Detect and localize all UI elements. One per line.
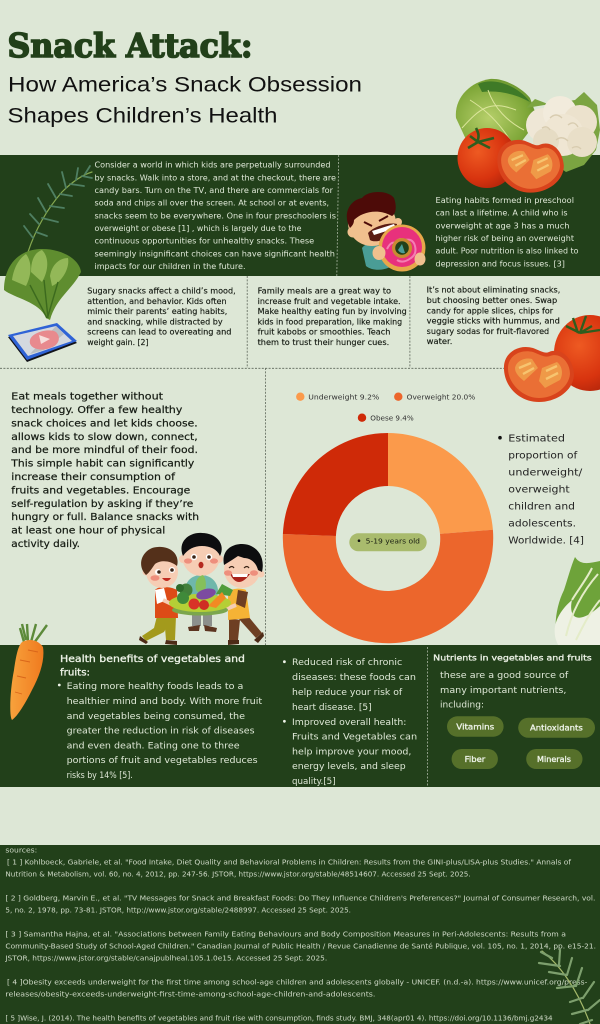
text: sources list: [ 4 ]Obesity exceeds underweight for the first time among school-age children and adolescents globally - UNICEF. (n.d.-a). https://www.unicef.org/press- [7, 979, 588, 987]
text: better snacks: candy for apple slices, chips for [427, 306, 554, 315]
text: nutrients intro: many important nutrients, [440, 686, 566, 696]
text: benefits column one: healthier mind and body. With more fruit [67, 697, 263, 707]
text: family meals: them to trust their hunger cues. [258, 338, 389, 347]
text: sources list: [ 5 ]Wise, J. (2014). The health benefits of vegetables and fruit rise with consumption, finds study. BMJ, 348(apr01 4). https://doi.org/10.1136/bmj.g2434 [5, 1015, 553, 1023]
text: chart description: adolescents. [508, 518, 576, 530]
icon: napa cabbage [555, 557, 600, 648]
text: family meal advice: snack choices and let kids choose. [11, 418, 198, 429]
pill: antioxidants [518, 718, 595, 738]
text: sugary snacks: Sugary snacks affect a child’s mood, [87, 286, 236, 296]
text: family meal advice: fruits and vegetables. Encourage [11, 485, 190, 496]
icon: rosemary corner sprig [539, 950, 600, 1024]
text: family meal advice: Eat meals together without [11, 392, 163, 403]
text: family meals: increase fruit and vegetable intake. [258, 297, 401, 306]
left child [139, 547, 180, 645]
text: intro paragraph: impacts for our children in the future. [94, 262, 246, 271]
text: sugary snacks [87, 286, 236, 347]
text: family meal advice: allows kids to slow down, connect, [11, 432, 198, 443]
text: chart description: proportion of [508, 450, 578, 462]
panel: intro band [0, 155, 600, 276]
legend: obese: Obese 9.4% [370, 414, 414, 422]
segment: obese [283, 433, 388, 536]
text: family meal advice: technology. Offer a few healthy [11, 405, 183, 416]
text: family meal advice: and be more mindful of their food. [11, 445, 198, 456]
text: benefits column one: and even death. Eating one to three [67, 742, 240, 752]
text: benefits column one: Eating more healthy foods leads to a [67, 682, 243, 692]
text: chart description: underweight/ [508, 468, 583, 478]
text: intro paragraph: seemingly insignificant choices can have significant health [94, 249, 335, 258]
icon: boy eating donut [347, 192, 426, 272]
text: sources list: [ 1 ] Kohlboeck, Gabriele, et al. "Food Intake, Diet Quality and Behavioral Problems in Children: Results from the GINI-plus/LISA-plus Studies." Annals of [7, 859, 572, 867]
age pill [349, 533, 427, 551]
text: benefits column two: heart disease. [5] [292, 703, 372, 713]
text: sources list: JSTOR, https://www.jstor.org/stable/canajpublheal.105.1.0e15. Accessed 25 Sept. 2025. [4, 955, 327, 963]
text: better snacks: water. [427, 337, 452, 346]
donut chart [283, 433, 493, 643]
segment: overweight [283, 530, 493, 643]
legend [296, 392, 475, 422]
text: chart description: overweight [508, 484, 570, 496]
text: benefits column two: help improve your mood, [292, 748, 411, 758]
segment: underweight [388, 433, 493, 534]
text: eating habits: Eating habits formed in preschool [436, 196, 574, 205]
middle child [179, 533, 223, 632]
legend: overweight: Overweight 20.0% [407, 392, 475, 402]
text: sources list: 5, no. 2, 1978, pp. 73-81. JSTOR, http://www.jstor.org/stable/2488997. Accessed 25 Sept. 2025. [5, 907, 351, 915]
text: sources list: Nutrition & Metabolism, vol. 60, no. 4, 2012, pp. 247-56. JSTOR, https://www.jstor.org/stable/48514607. Accessed 25 Sept. 2025. [5, 871, 471, 879]
text: eating habits: can last a lifetime. A child who is [436, 209, 568, 218]
text: better snacks [427, 286, 560, 346]
text: family meals: Make healthy eating fun by involving [258, 307, 407, 316]
text: benefits column one: portions of fruit and vegetables reduces [67, 756, 258, 766]
text: chart description [498, 434, 584, 546]
text: benefits column two [283, 658, 417, 787]
text: better snacks: but choosing better ones. Swap [427, 296, 557, 305]
text: family meal advice: self-regulation by asking if they’re [11, 499, 193, 510]
text: benefits column two: energy levels, and sleep [292, 762, 406, 772]
text: benefits column two: help reduce your risk of [292, 688, 403, 698]
pill: minerals [526, 749, 582, 769]
text: better snacks: veggie sticks with hummus, and [427, 317, 560, 326]
text: family meals: kids in food preparation, like making [258, 317, 402, 326]
text: family meals [258, 286, 407, 347]
panel: three tip columns [0, 276, 560, 645]
right child [223, 544, 264, 645]
text: sources list: Community-Based Study of School-Aged Children." Canadian Journal of Public Health / Revue Canadienne de Santé Publique, vol. 105, no. 1, 2014, pp. e15-21. [5, 943, 596, 951]
text: intro paragraph: snacks seem to be everywhere. One in four preschoolers is [94, 211, 336, 220]
icon: vegetable cluster [456, 79, 600, 193]
subtitle: Shapes Children’s Health [8, 105, 278, 128]
text: benefits column two: quality.[5] [292, 777, 336, 787]
icon: tomatoes [504, 315, 600, 402]
subtitle [8, 74, 362, 128]
title: Snack Attack: [8, 26, 252, 65]
text: sources list: [ 3 ] Samantha Hajna, et al. "Associations between Family Eating Behaviours and Body Composition Measures in Peri-Adolescents: Results from a [5, 931, 566, 939]
text: family meals: fruit kabobs or smoothies. Teach [258, 328, 391, 337]
text: benefits column one: risks by 14% [5]. [67, 771, 133, 781]
heading: health benefits: Health benefits of vegetables and [60, 654, 245, 665]
text: sugary snacks: weight gain. [2] [87, 338, 149, 347]
pill: fiber [452, 749, 498, 769]
text: nutrients intro: these are a good source of [440, 671, 569, 681]
text: benefits column one: greater the reduction in risk of diseases [67, 726, 255, 736]
text: sources list: releases/obesity-exceeds-underweight-first-time-among-school-age-children-and-adolescents. [5, 991, 375, 999]
text: better snacks: sugary sodas for fruit-flavored [427, 327, 549, 336]
text: family meals: Family meals are a great way to [258, 286, 392, 296]
icon: rosemary sprig [24, 166, 92, 252]
text: intro paragraph: by snacks. Walk into a store, and at the checkout, there are [94, 173, 336, 182]
text: intro paragraph: overweight or obese [1] , which is largely due to the [94, 224, 302, 233]
text: eating habits: depression and focus issues. [3] [436, 259, 565, 268]
text: nutrients intro: including: [440, 700, 484, 710]
text: family meal advice: hungry or full. Balance snacks with [11, 512, 199, 523]
pill: antioxidants: Antioxidants [530, 724, 583, 733]
legend: underweight: Underweight 9.2% [308, 392, 379, 402]
text: family meal advice: This simple habit can significantly [10, 459, 195, 470]
text: sugary snacks: and snacking, while distracted by [87, 317, 223, 326]
text: intro paragraph: Consider a world in which kids are perpetually surrounded [94, 161, 331, 170]
text: benefits column two: Reduced risk of chronic [292, 658, 402, 668]
text: sugary snacks: mimic their parents’ eating habits, [87, 307, 227, 316]
text: chart description: Worldwide. [4] [508, 536, 584, 546]
text: chart description: Estimated [508, 434, 565, 444]
text: nutrients intro [440, 671, 569, 710]
text: benefits column two: Improved overall health: [292, 718, 406, 728]
subtitle: How America’s Snack Obsession [8, 74, 362, 97]
vegetable tray [169, 575, 233, 616]
text: intro paragraph: soda and chips all over the screen. At school or at events, [94, 199, 329, 208]
heading: health benefits: fruits: [60, 668, 90, 678]
icon: spinach bunch [4, 249, 81, 320]
text: intro paragraph: candy bars. Turn on the TV, and there are commercials for [94, 186, 334, 195]
text: sugary snacks: attention, and behavior. Kids often [87, 297, 227, 306]
text: chart description: children and [508, 502, 575, 512]
text: sources list: [ 2 ] Goldberg, Marvin E., et al. "TV Messages for Snack and Breakfast Foods: Do They Influence Children's Preferences?" Journal of Consumer Research, vol. [5, 895, 595, 903]
text: eating habits: overweight at age 3 has a much [436, 221, 570, 230]
text: eating habits: adult. Poor nutrition is also linked to [436, 247, 579, 256]
text: sources list [4, 847, 596, 1023]
heading: health benefits [60, 654, 245, 678]
panel: health benefits band [0, 645, 600, 787]
heading: nutrients: Nutrients in vegetables and fruits [433, 652, 592, 662]
age pill: 5-19 years old [366, 536, 420, 545]
text: intro paragraph: continuous opportunities for unhealthy snacks. These [94, 237, 315, 246]
text: eating habits: higher risk of being an overweight [436, 234, 574, 243]
text: benefits column one: and vegetables being consumed, the [67, 712, 245, 722]
text: intro paragraph [94, 161, 336, 271]
icon: tablet with play button [8, 323, 77, 362]
panel: sources band [0, 845, 600, 1024]
pill: fiber: Fiber [465, 755, 486, 764]
text: family meal advice: at least one hour of physical [11, 526, 165, 537]
text: eating habits [436, 196, 579, 268]
text: benefits column two: Fruits and Vegetables can [292, 732, 417, 742]
text: family meal advice: increase their consumption of [11, 472, 176, 483]
text: benefits column two: diseases: these foods can [292, 673, 416, 683]
text: benefits column one [58, 682, 263, 781]
pill: vitamins [447, 716, 504, 737]
pill: vitamins: Vitamins [456, 722, 494, 732]
text: better snacks: It’s not about eliminating snacks, [427, 286, 560, 295]
icon: children holding vegetable tray [139, 533, 264, 645]
text: family meal advice [10, 392, 199, 550]
text: sources list: sources: [5, 847, 37, 855]
text: sugary snacks: screens can lead to overeating and [87, 328, 232, 337]
pill: minerals: Minerals [537, 755, 571, 764]
text: family meal advice: activity daily. [11, 539, 80, 550]
icon: carrot [10, 624, 47, 720]
